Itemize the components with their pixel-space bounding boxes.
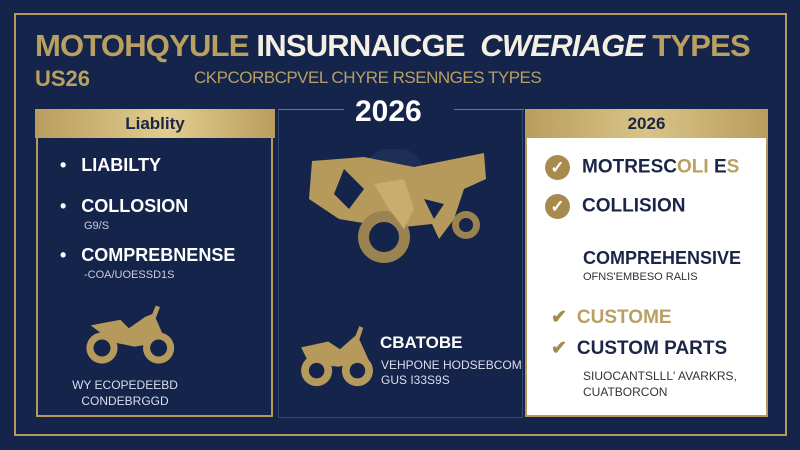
item 1: ✓ xyxy=(550,158,565,177)
middle text: CBATOBE xyxy=(380,333,462,352)
title: MOTOHQYULE INSURNAICGE CWERIAGE TYPES xyxy=(35,28,750,63)
right caption: CUATBORCON xyxy=(583,385,667,399)
caption left: WY ECOPEDEEBD xyxy=(72,378,178,392)
panel: left liability: G9/S xyxy=(84,220,109,232)
panel: right xyxy=(525,109,768,417)
subtitle: CKPCORBCPVEL CHYRE RSENNGES TYPES xyxy=(194,68,541,87)
icon: motorcycle middle xyxy=(301,326,373,386)
left header xyxy=(35,109,275,138)
item 3: COMPREHENSIVE xyxy=(583,248,741,268)
list item comprehensive: • COMPREBNENSE xyxy=(60,245,235,265)
right header xyxy=(525,109,768,138)
panel: middle: GUS I33S9S xyxy=(381,373,450,387)
list item collision: • COLLOSION xyxy=(60,196,188,216)
item 1: MOTRESCOLI ES xyxy=(582,157,739,178)
panel: middle: VEHPONE HODSEBCOM xyxy=(381,358,522,372)
year heading: 2026 xyxy=(355,95,422,128)
subtitle left: US26 xyxy=(35,66,90,91)
panel: left liability: -COA/UOESSD1S xyxy=(84,269,174,281)
map with motorcycle xyxy=(309,149,486,263)
right caption xyxy=(583,369,737,399)
item 5: ✔ CUSTOM PARTS xyxy=(551,338,727,359)
caption left xyxy=(72,378,178,408)
panel: right: OFNS'EMBESO RALIS xyxy=(583,271,698,283)
right caption: SIUOCANTSLLL' AVARKRS, xyxy=(583,369,737,383)
item 4: ✔ CUSTOME xyxy=(551,307,672,328)
panel: middle xyxy=(278,109,523,418)
right header: 2026 xyxy=(628,114,665,133)
item 2: ✓ xyxy=(550,197,565,216)
list item liability: • LIABILTY xyxy=(60,155,161,175)
caption left: CONDEBRGGD xyxy=(81,394,169,408)
item 1 xyxy=(545,155,739,180)
left header: Liablity xyxy=(125,114,185,133)
item 2 xyxy=(545,194,685,219)
panel: left liability xyxy=(35,109,275,417)
icon: motorcycle left xyxy=(86,306,174,364)
item 2: COLLISION xyxy=(582,196,685,217)
